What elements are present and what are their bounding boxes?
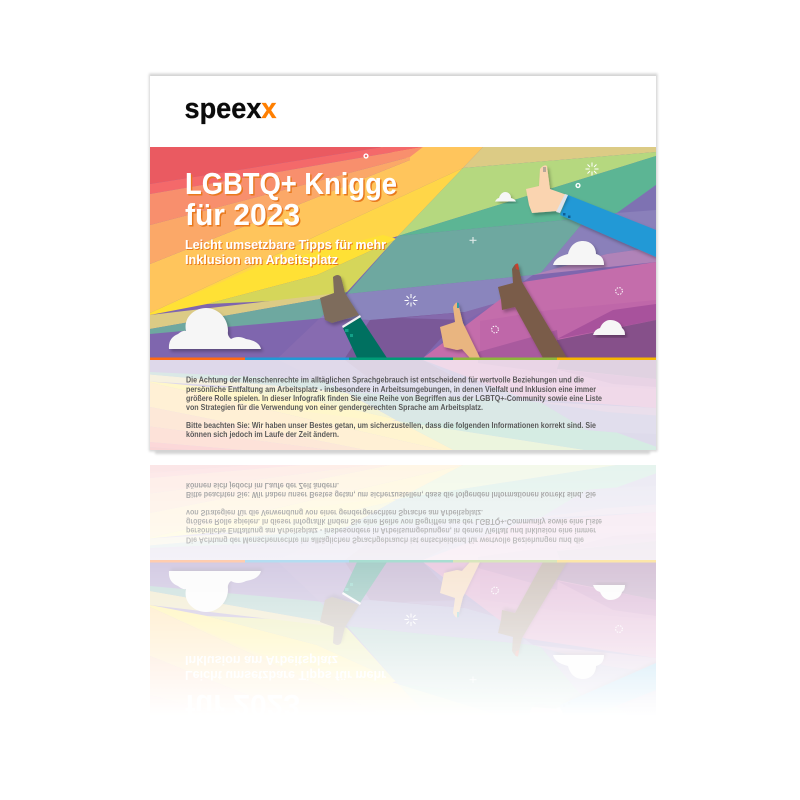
mirrored reflection of the card: können sich jedoch im Laufe der Zeit ändern. [186,481,339,490]
hero figures: clouds, thumbs-up hands and sparkles [169,154,656,358]
mirrored reflection of the card: Inklusion am Arbeitsplatz [185,653,338,668]
intro text [186,376,602,439]
title: für 2023 [185,198,300,232]
mirrored reflection of the card: persönliche Entfaltung am Arbeitsplatz - insbesondere in Arbeitsumgebungen, in denen Vielfalt und Inklusion eine immer [186,526,596,535]
intro text: Die Achtung der Menschenrechte im alltäglichen Sprachgebrauch ist entscheidend für wertvolle Beziehungen und die [186,376,584,384]
pale rainbow text panel [150,360,656,450]
subtitle: Inklusion am Arbeitsplatz [185,252,338,267]
mirrored reflection of the card: für 2023 [185,688,300,722]
mirrored reflection of the card [150,465,656,700]
intro text: persönliche Entfaltung am Arbeitsplatz - insbesondere in Arbeitsumgebungen, in denen Vielfalt und Inklusion eine immer [186,385,596,394]
rainbow divider stripe [150,358,656,360]
mirrored reflection of the card: Bitte beachten Sie: Wir haben unser Bestes getan, um sicherzustellen, dass die folgenden Informationen korrekt sind. Sie [186,490,596,499]
mirrored reflection of the card: Die Achtung der Menschenrechte im alltäglichen Sprachgebrauch ist entscheidend für wertvolle Beziehungen und die [186,536,584,544]
mirrored reflection of the card: größere Rolle spielen. In dieser Infografik finden Sie eine Reihe von Begriffen aus der LGBTQ+-Community sowie eine Liste [186,517,602,526]
title: LGBTQ+ Knigge [185,167,397,201]
card shadow [149,74,658,454]
intro text: von Strategien für die Verwendung von einer gendergerechten Sprache am Arbeitsplatz. [186,403,483,412]
mirrored reflection of the card: von Strategien für die Verwendung von einer gendergerechten Sprache am Arbeitsplatz. [186,508,483,517]
intro text: können sich jedoch im Laufe der Zeit ändern. [186,430,339,439]
intro text: größere Rolle spielen. In dieser Infografik finden Sie eine Reihe von Begriffen aus der LGBTQ+-Community sowie eine Liste [186,394,602,403]
header band [150,76,656,147]
logo: speexx: speexx [184,93,277,125]
hero rainbow background [150,147,656,358]
subtitle [185,237,386,267]
title [185,167,397,232]
mirrored reflection of the card: LGBTQ+ Knigge [185,719,397,753]
mirrored reflection of the card: Leicht umsetzbare Tipps für mehr [185,668,386,683]
subtitle: Leicht umsetzbare Tipps für mehr [185,237,386,252]
infographic card [150,76,656,466]
intro text: Bitte beachten Sie: Wir haben unser Bestes getan, um sicherzustellen, dass die folgenden Informationen korrekt sind. Sie [186,421,596,430]
